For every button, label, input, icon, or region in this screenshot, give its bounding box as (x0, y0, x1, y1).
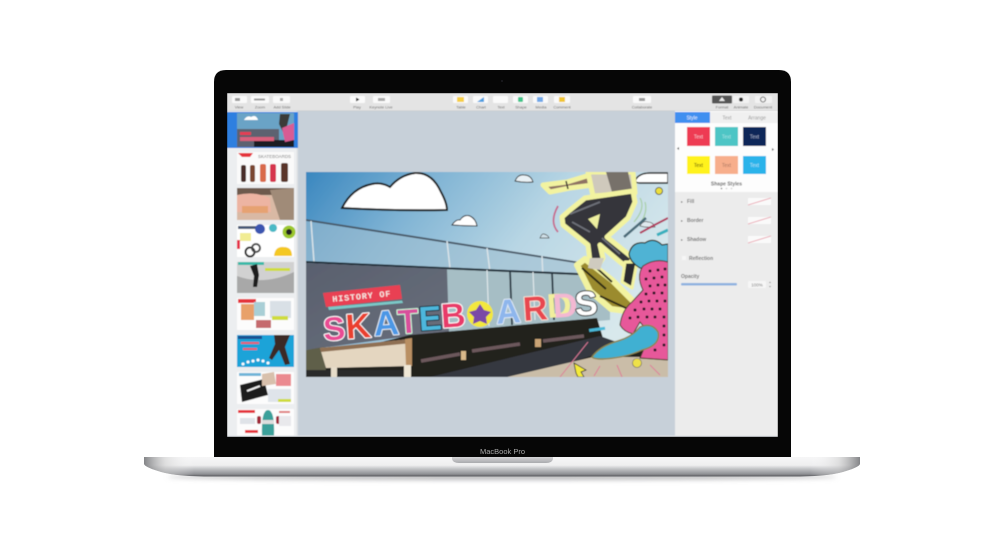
property rows: Reflection (689, 256, 713, 262)
arm (543, 175, 593, 192)
reflection checkbox (682, 256, 686, 260)
toolbar labels: Format (716, 104, 729, 110)
property rows: Fill (687, 199, 695, 205)
inspector panel (675, 111, 778, 437)
heading: Skateboards: R (522, 289, 549, 329)
green motion lines (634, 198, 646, 224)
dark ramp and ground (306, 318, 668, 377)
shape style swatches: Text (750, 163, 760, 169)
thumbnail 2 (237, 152, 294, 184)
cursor (574, 363, 586, 377)
title text (322, 284, 599, 348)
shoes (588, 258, 604, 270)
heading: Skateboards: A (495, 292, 522, 332)
heading: Skateboards: K (344, 306, 372, 347)
heading: Skateboards: T (397, 302, 420, 342)
pink decorative swoosh (554, 206, 558, 232)
colour wells (748, 198, 771, 243)
white bench (320, 338, 412, 377)
toolbar labels: Add Slide (273, 104, 291, 110)
jeans (562, 191, 635, 268)
toolbar labels: Text (497, 104, 506, 110)
heading: Skateboards: B (440, 296, 467, 336)
model label: MacBook Pro (480, 447, 525, 456)
skateboard (577, 259, 636, 312)
inspector tabs: Text (722, 116, 732, 122)
thumbnail 3 (237, 188, 294, 220)
toolbar labels: Document (754, 104, 773, 110)
heading: Skateboards: E (418, 299, 443, 339)
toolbar labels: Shape (515, 104, 528, 110)
blue splash (629, 240, 668, 270)
base notch (452, 457, 553, 463)
thumbnail 1 (237, 113, 294, 147)
pale background right of banner (447, 268, 610, 334)
toolbar labels: Comment (553, 104, 572, 110)
toolbar labels: View (235, 104, 243, 110)
thumbnail 6 (237, 298, 294, 330)
top cloud (515, 175, 533, 182)
sky (306, 172, 668, 347)
mid cloud (640, 222, 655, 227)
laptop shadow (167, 474, 837, 480)
inspector tabs (675, 112, 778, 123)
toolbar labels: Animate (734, 104, 749, 110)
slide navigator (227, 111, 298, 437)
fence (306, 218, 578, 274)
laptop base (144, 457, 860, 476)
shape style swatches (687, 127, 766, 174)
toolbar labels: Collaborate (632, 104, 653, 110)
tiny cloud (540, 234, 549, 238)
heading: Skateboards: S (574, 284, 599, 324)
opacity slider: 100% (751, 282, 763, 288)
main slide: History of Skateboards (306, 172, 668, 377)
bracelet (566, 181, 568, 189)
heading: Skateboards: S (322, 309, 346, 348)
shape style swatches: Text (722, 134, 732, 140)
yellow dot (656, 188, 662, 194)
heading: Skateboards: A (372, 303, 400, 344)
screen: Keynote app (227, 93, 778, 437)
swatch arrows (677, 147, 774, 151)
toolbar labels: Table (456, 104, 467, 110)
blue pond (592, 325, 658, 359)
thumbnail 7 (237, 335, 294, 367)
rocks at left (306, 347, 326, 371)
yellow ball (632, 358, 642, 368)
property rows (681, 199, 713, 280)
ramp highlights (421, 336, 584, 361)
shirt (588, 172, 635, 196)
infographic: MacBook Pro showing Keynote (144, 70, 860, 482)
motion streaks (560, 342, 660, 377)
heading: Skateboards (322, 284, 599, 348)
large cloud (342, 173, 447, 210)
toolbar labels: Chart (476, 104, 487, 110)
thumbnail 4 (237, 224, 296, 257)
camera (501, 80, 503, 82)
gap between legs (588, 214, 600, 229)
shape style swatches: Text (750, 134, 760, 140)
banner (306, 263, 449, 350)
dark fence rail (306, 262, 600, 275)
thumbnail 9 (237, 409, 294, 437)
pink dotted blob (620, 261, 668, 360)
shape style swatches: Text (722, 163, 732, 169)
inspector tabs: Arrange (748, 116, 766, 122)
toolbar labels: Zoom (255, 104, 266, 110)
heading: Skateboards: D (546, 286, 573, 326)
label: History of: HISTORY OF (332, 289, 392, 305)
inspector tabs: Style (686, 116, 698, 122)
toolbar labels: Play (353, 104, 361, 110)
heading: Skateboards: D (552, 286, 579, 326)
thumbnail 5 (237, 262, 294, 293)
thumbnail 2: SKATEBOARDS (258, 154, 291, 159)
small cloud (452, 216, 477, 226)
property rows: Border (687, 218, 703, 224)
shape style swatches: Text (694, 163, 704, 169)
jeans creases (570, 202, 620, 254)
label: History of (323, 285, 403, 310)
toolbar labels: Media (536, 104, 547, 110)
toolbar labels: Keynote Live (369, 104, 393, 110)
shape styles label: Shape Styles (711, 182, 742, 188)
property rows: Opacity (681, 274, 700, 280)
canvas background (298, 111, 675, 437)
toolbar labels (234, 106, 772, 110)
thumbnail 8 (237, 372, 294, 404)
opacity slider (681, 281, 771, 288)
property rows: Shadow (687, 237, 706, 243)
toolbar (227, 93, 778, 111)
shape style swatches: Text (694, 134, 704, 140)
top-right cloud (636, 173, 668, 183)
pop art blobs (554, 188, 668, 377)
bottom edge of window (227, 436, 778, 437)
rider and skateboard (543, 172, 637, 312)
